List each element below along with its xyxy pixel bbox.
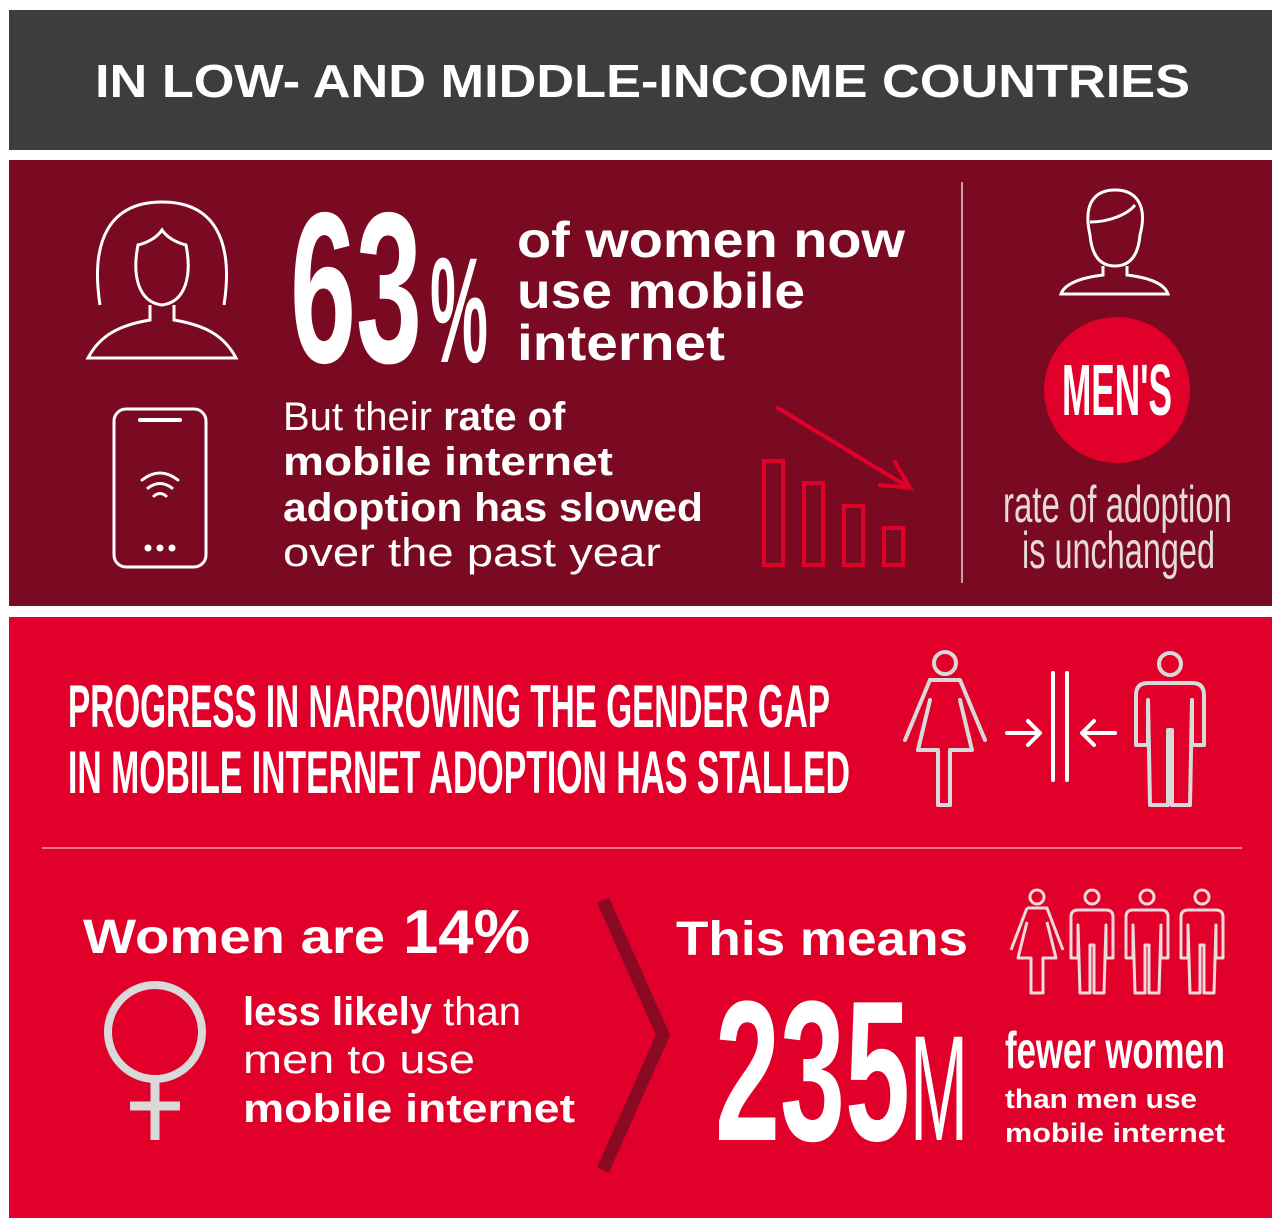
chart: declining bars (764, 408, 910, 565)
panel: women adoption: % (430, 226, 488, 394)
text: less likely: mobile internet (243, 1087, 575, 1131)
text: women 14%: Women are (83, 911, 385, 964)
text: fewer women: mobile internet (1005, 1118, 1225, 1148)
text: adoption slowed: adoption has slowed (283, 486, 703, 530)
text: adoption slowed: mobile internet (283, 440, 613, 484)
text: less likely (243, 990, 575, 1131)
icon: four people (1011, 890, 1223, 993)
arrow: down (778, 408, 910, 488)
text: rate unchanged (1003, 476, 1232, 580)
arrow: chevron (603, 900, 663, 1170)
stat: 63%: 63 (290, 167, 422, 408)
panel: gender gap (9, 617, 1272, 1218)
text: of women now use mobile internet (517, 212, 905, 371)
text: less likely: less likely than (243, 990, 521, 1034)
icon: woman (88, 202, 236, 358)
text: women 14%: 14% (403, 898, 530, 967)
icon: phone (114, 409, 206, 567)
header bar (9, 10, 1272, 150)
text: fewer women (1005, 1022, 1225, 1148)
panel: women adoption (9, 160, 1272, 606)
icon: gap narrowing (905, 652, 1204, 805)
icon: venus (108, 985, 202, 1140)
text: adoption slowed (283, 395, 703, 575)
stat: 235M: 235 (715, 960, 910, 1183)
title: IN LOW- AND MIDDLE-INCOME COUNTRIES (95, 55, 1190, 107)
panel: gender gap: M (910, 1004, 968, 1172)
text: of women now use mobile internet: use mobile (517, 263, 805, 319)
text: this means: This means (676, 913, 968, 966)
text: women 14% (83, 898, 530, 967)
text: less likely: men to use (243, 1038, 475, 1082)
badge: MEN'S (1044, 317, 1190, 463)
text: adoption slowed: over the past year (283, 531, 661, 575)
icon: man (1061, 190, 1168, 294)
text: fewer women: than men use (1005, 1084, 1197, 1114)
text: of women now use mobile internet: of women now (517, 212, 905, 268)
heading: progress stalled (68, 673, 850, 806)
text: adoption slowed: But their rate of (283, 395, 566, 439)
text: of women now use mobile internet: internet (517, 315, 725, 371)
